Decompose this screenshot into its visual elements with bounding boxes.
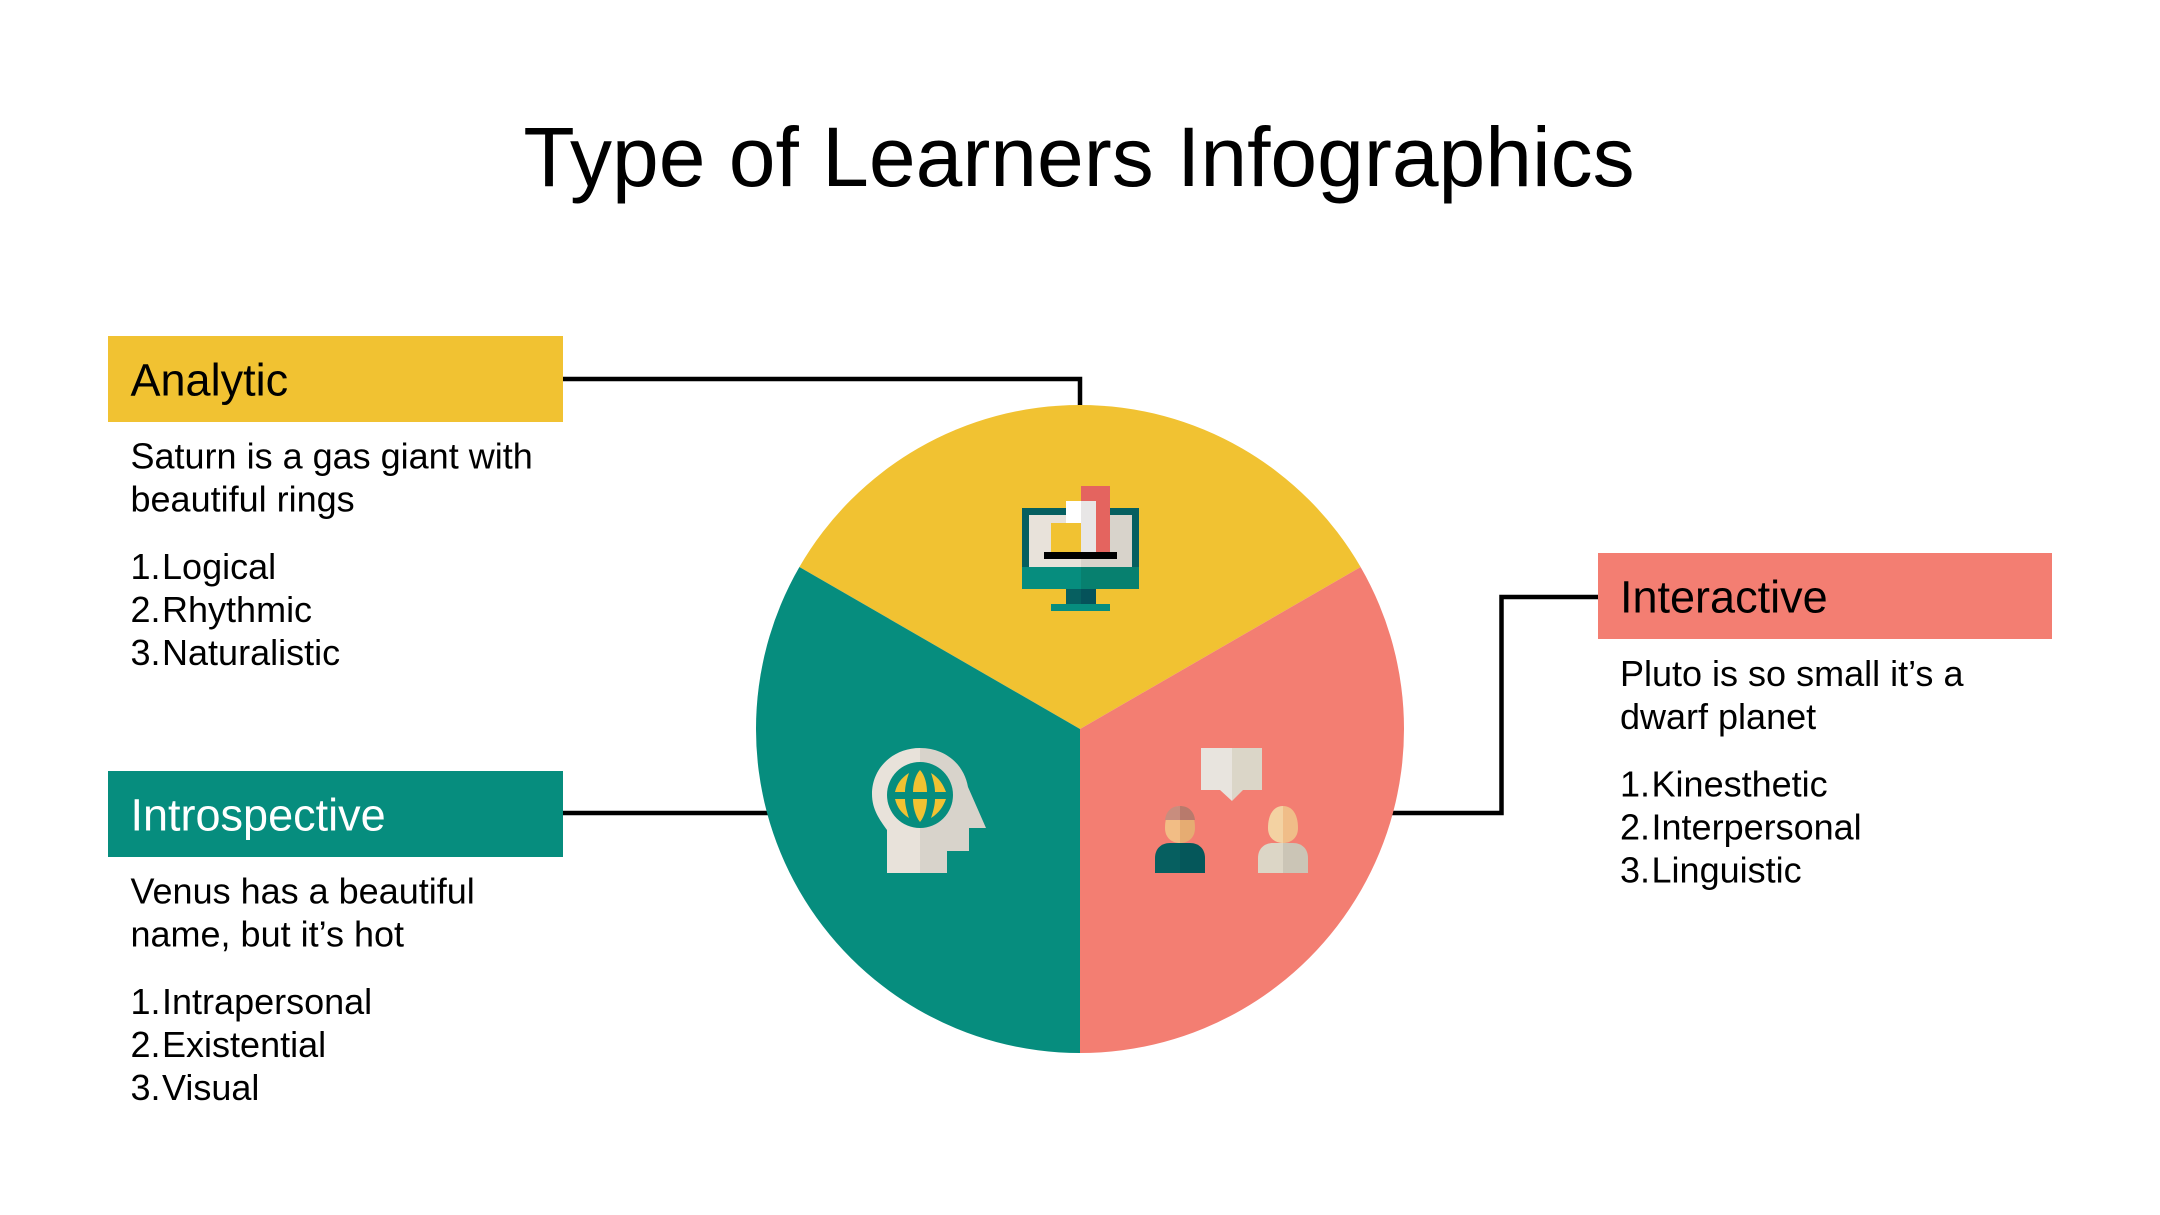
list: Introspective: 3.Visual [130, 1067, 259, 1108]
list: Analytic: 2.Rhythmic [130, 589, 312, 630]
heading: Analytic: Analytic [130, 354, 288, 406]
segment: yellow [799, 405, 1361, 729]
text: Analytic description: Saturn is a gas giant with [130, 436, 533, 476]
heading: Interactive [1598, 553, 2052, 639]
panel: Introspective [108, 771, 563, 1108]
connector: Introspective to pie [563, 811, 775, 815]
text: Introspective description: Venus has a beautiful [130, 870, 475, 912]
heading: Interactive: Interactive [1620, 572, 1828, 622]
text: Introspective description: name, but it’s hot [130, 914, 404, 954]
connector: Analytic to pie [563, 379, 1080, 406]
text: Interactive description: dwarf planet [1620, 696, 1816, 737]
panel: Interactive [1598, 553, 2052, 890]
icon: head with globe [872, 748, 986, 873]
pie chart [756, 405, 1404, 1053]
title: Type of Learners Infographics [523, 110, 1635, 204]
list: Introspective: 1.Intrapersonal [130, 981, 372, 1022]
right person [1268, 806, 1283, 843]
heading: Introspective: Introspective [130, 790, 386, 840]
heading: Analytic [108, 336, 563, 422]
heading: Introspective [108, 771, 563, 857]
list: Analytic: 3.Naturalistic [130, 632, 340, 673]
list: Introspective: 2.Existential [130, 1024, 326, 1065]
connector: Interactive to pie [1385, 597, 1598, 813]
icon: monitor with bar chart [1022, 486, 1139, 611]
icon: two people with speech bubble [1155, 748, 1308, 873]
left person [1165, 806, 1180, 843]
speech bubble [1201, 748, 1232, 801]
list: Interactive: 1.Kinesthetic [1620, 764, 1828, 804]
segment: coral [1080, 567, 1404, 1053]
panel: Analytic [108, 336, 563, 673]
text: Interactive description: Pluto is so small it’s a [1620, 653, 1964, 694]
text: Analytic description: beautiful rings [130, 478, 355, 520]
segment: teal [756, 567, 1080, 1053]
list: Interactive: 2.Interpersonal [1620, 806, 1862, 848]
list: Interactive: 3.Linguistic [1620, 850, 1802, 890]
list: Analytic: 1.Logical [130, 546, 276, 587]
